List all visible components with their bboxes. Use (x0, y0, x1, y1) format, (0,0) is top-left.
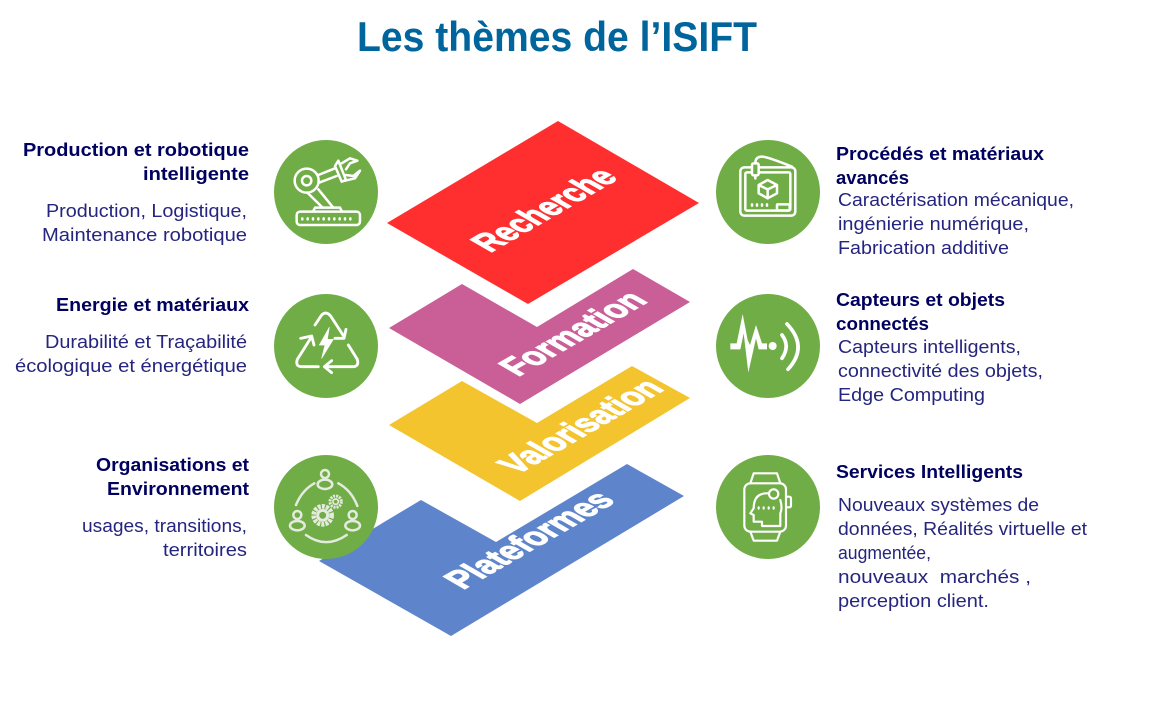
text block: Energie et matériaux: Energie et matériaux (56, 295, 249, 315)
text block: Capteurs et objets connectés: Capteurs intelligents, (838, 336, 1021, 357)
text block: Procédés et matériaux avancés: Caractérisation mécanique, (838, 189, 1074, 210)
text block: Energie et matériaux: Durabilité et Traçabilité (45, 331, 247, 352)
icon: smartwatch with head (716, 455, 820, 559)
text block: Services Intelligents: nouveaux marchés , (838, 566, 1031, 587)
layer: Plateformes (319, 464, 684, 636)
icon: recycling with lightning bolt (274, 294, 378, 398)
text block: Organisations et Environnement: usages, transitions, (82, 515, 247, 536)
text block: Procédés et matériaux avancés (836, 144, 1074, 258)
text block: Capteurs et objets connectés: Capteurs et objets (836, 290, 1005, 310)
text block: Services Intelligents: perception client. (838, 590, 989, 611)
title: Les thèmes de l’ISIFT (357, 13, 757, 60)
text block: Production et robotique intelligente (23, 140, 249, 245)
icon: 3D printer (716, 140, 820, 244)
layer: Valorisation: Valorisation (489, 374, 672, 479)
layer: Recherche (387, 121, 699, 304)
text block: Services Intelligents (836, 462, 1087, 611)
text block: Procédés et matériaux avancés: Procédés et matériaux (836, 144, 1044, 164)
text block: Energie et matériaux: écologique et énergétique (15, 355, 247, 376)
text block: Production et robotique intelligente: Production, Logistique, (46, 200, 247, 221)
text block: Organisations et Environnement: Environnement (107, 479, 249, 499)
layer: Plateformes: Plateformes (435, 486, 623, 594)
text block: Services Intelligents: Nouveaux systèmes de (838, 494, 1039, 515)
text block: Production et robotique intelligente: Production et robotique (23, 140, 249, 160)
text block: Procédés et matériaux avancés: avancés (836, 168, 909, 188)
text block: Procédés et matériaux avancés: ingénierie numérique, (838, 213, 1029, 234)
layer: Formation (389, 269, 690, 404)
text block: Capteurs et objets connectés: connectés (836, 314, 929, 334)
layer: Recherche: Recherche (462, 163, 626, 257)
text block: Capteurs et objets connectés (836, 290, 1043, 405)
icon: robotic arm (274, 140, 378, 244)
icon: sensor signal (716, 294, 820, 398)
text block: Capteurs et objets connectés: connectivité des objets, (838, 360, 1043, 381)
text block: Energie et matériaux (15, 295, 249, 376)
text block: Procédés et matériaux avancés: Fabrication additive (838, 237, 1009, 258)
text block: Services Intelligents: données, Réalités virtuelle et (838, 518, 1087, 539)
layer: Formation: Formation (490, 286, 656, 381)
text block: Production et robotique intelligente: Maintenance robotique (42, 224, 247, 245)
layer: Valorisation (389, 366, 690, 501)
icon: people and gears (274, 455, 378, 559)
text block: Organisations et Environnement: Organisations et (96, 455, 249, 475)
text block: Services Intelligents: Services Intelligents (836, 462, 1023, 482)
text block: Services Intelligents: augmentée, (838, 542, 931, 563)
text block: Production et robotique intelligente: intelligente (143, 164, 249, 184)
text block: Capteurs et objets connectés: Edge Computing (838, 384, 985, 405)
text block: Organisations et Environnement (82, 455, 249, 560)
text block: Organisations et Environnement: territoires (163, 539, 247, 560)
